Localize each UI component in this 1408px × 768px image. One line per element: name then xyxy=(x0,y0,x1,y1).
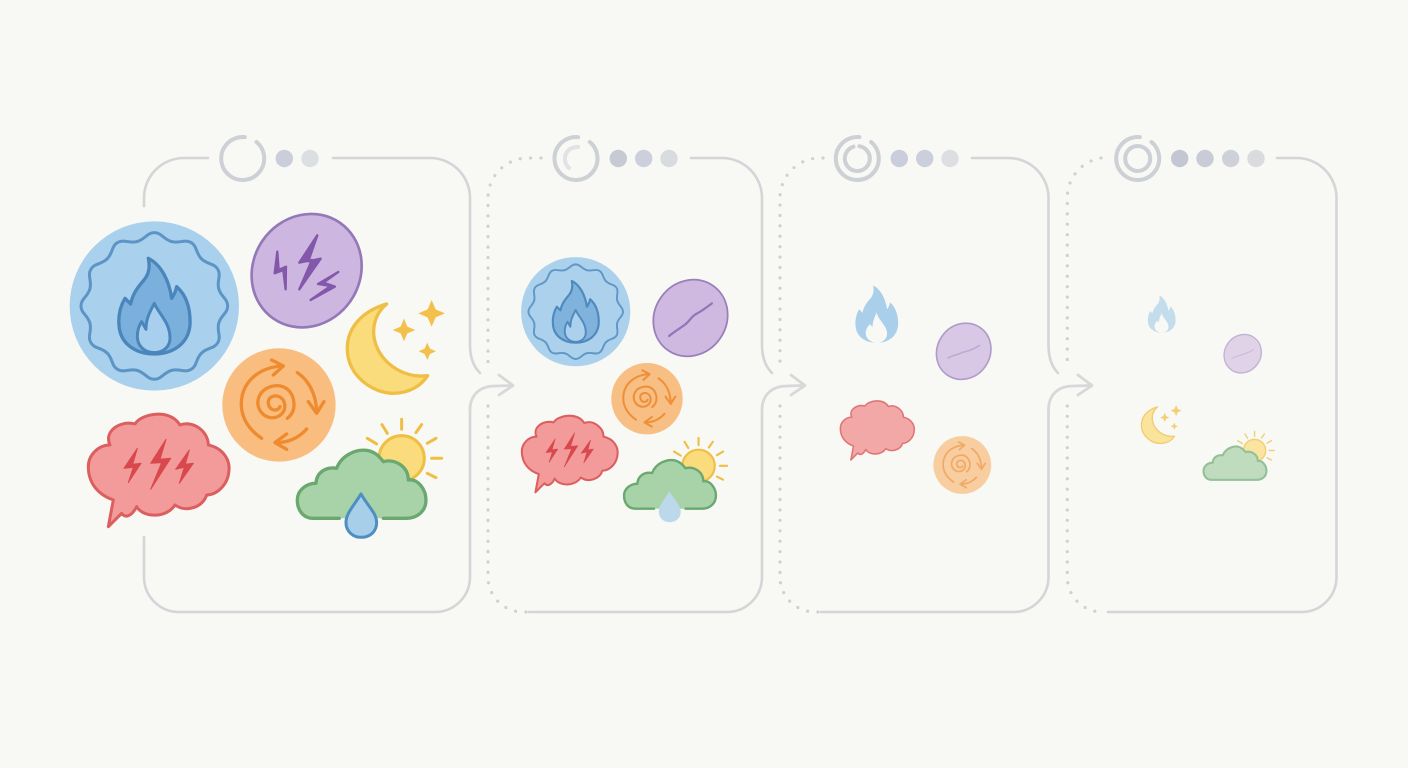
panel: stage 4 xyxy=(1067,128,1336,612)
panel: stage 1 xyxy=(70,128,480,612)
progress indicator: three of three xyxy=(827,128,959,189)
icon: orange spiral, medium xyxy=(611,363,683,434)
panel: stage 2 xyxy=(488,128,772,612)
icon: flame badge, medium xyxy=(521,257,630,366)
icon: cloud, sun and pale drop, medium xyxy=(624,438,727,522)
icon: pale purple oval xyxy=(926,313,1002,390)
icon: purple lightning oval, large xyxy=(230,192,384,349)
icon: orange spiral, large xyxy=(222,348,336,462)
icon: red speech bubble with bolts, medium xyxy=(522,416,618,492)
panel: stage 3 xyxy=(780,128,1058,612)
icon: faint blue flame xyxy=(1148,295,1176,333)
icon: faint moon and stars xyxy=(1141,405,1182,443)
icon: empty red speech bubble xyxy=(840,401,914,460)
arrow: stage 2 to stage 3 xyxy=(762,375,805,410)
panel frame: stage 1 xyxy=(144,158,480,612)
progress indicator: one of three xyxy=(212,128,319,189)
panel frame: stage 2 xyxy=(488,158,772,612)
icon: flame badge, large xyxy=(70,221,239,391)
panel frame: stage 4 xyxy=(1067,158,1336,612)
icon: faint cloud and sun xyxy=(1204,431,1274,480)
icon: pale orange spiral xyxy=(933,436,991,494)
icon: cloud, sun and drop, large xyxy=(297,419,442,537)
icon: faint purple oval xyxy=(1217,327,1269,380)
arrow: stage 1 to stage 2 xyxy=(470,375,513,410)
icon: purple oval with faint line, medium xyxy=(638,265,743,371)
progress indicator: four dots xyxy=(1107,128,1265,189)
icon: red speech bubble with bolts, large xyxy=(88,414,229,527)
progress indicator: two of three xyxy=(546,128,678,189)
icon: moon and stars, large xyxy=(347,300,445,393)
panel frame: stage 3 xyxy=(780,158,1058,612)
arrow: stage 3 to stage 4 xyxy=(1048,375,1092,410)
icon: plain blue flame xyxy=(855,285,898,343)
